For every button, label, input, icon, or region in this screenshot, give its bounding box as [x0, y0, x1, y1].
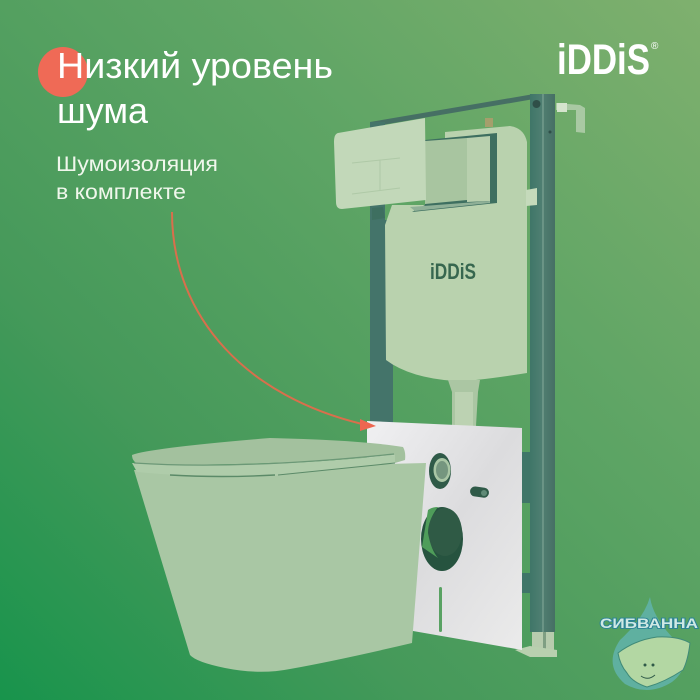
- flush plate: [334, 118, 426, 209]
- large drain opening: [421, 507, 463, 571]
- title: шума: [57, 90, 149, 131]
- wall bracket: [556, 103, 585, 133]
- installation frame: [370, 94, 585, 657]
- subtitle: Шумоизоляция: [56, 153, 218, 176]
- title: Низкий уровень: [57, 45, 333, 86]
- subtitle: в комплекте: [56, 181, 186, 204]
- cistern tank: [372, 118, 537, 381]
- drain pipe: [448, 380, 480, 426]
- toilet bowl: [132, 438, 426, 672]
- tank logo: iDDiS: [430, 259, 476, 284]
- toilet seat and lid: [132, 438, 405, 476]
- sound insulation panel: [367, 421, 522, 650]
- flush module box: [410, 133, 497, 212]
- small opening: [469, 486, 490, 498]
- brand logo: ®: [651, 41, 659, 52]
- brand logo: iDDiS: [557, 36, 650, 84]
- frame feet: [515, 632, 557, 657]
- subtitle: [56, 153, 218, 204]
- arrow: [172, 212, 376, 431]
- title: [57, 45, 333, 131]
- watermark: Сибванна: [600, 597, 698, 690]
- upper flush opening: [429, 453, 451, 489]
- watermark: Сибванна: СИБВАННА: [600, 615, 698, 631]
- accent circle: [38, 47, 88, 97]
- slot: [439, 587, 442, 632]
